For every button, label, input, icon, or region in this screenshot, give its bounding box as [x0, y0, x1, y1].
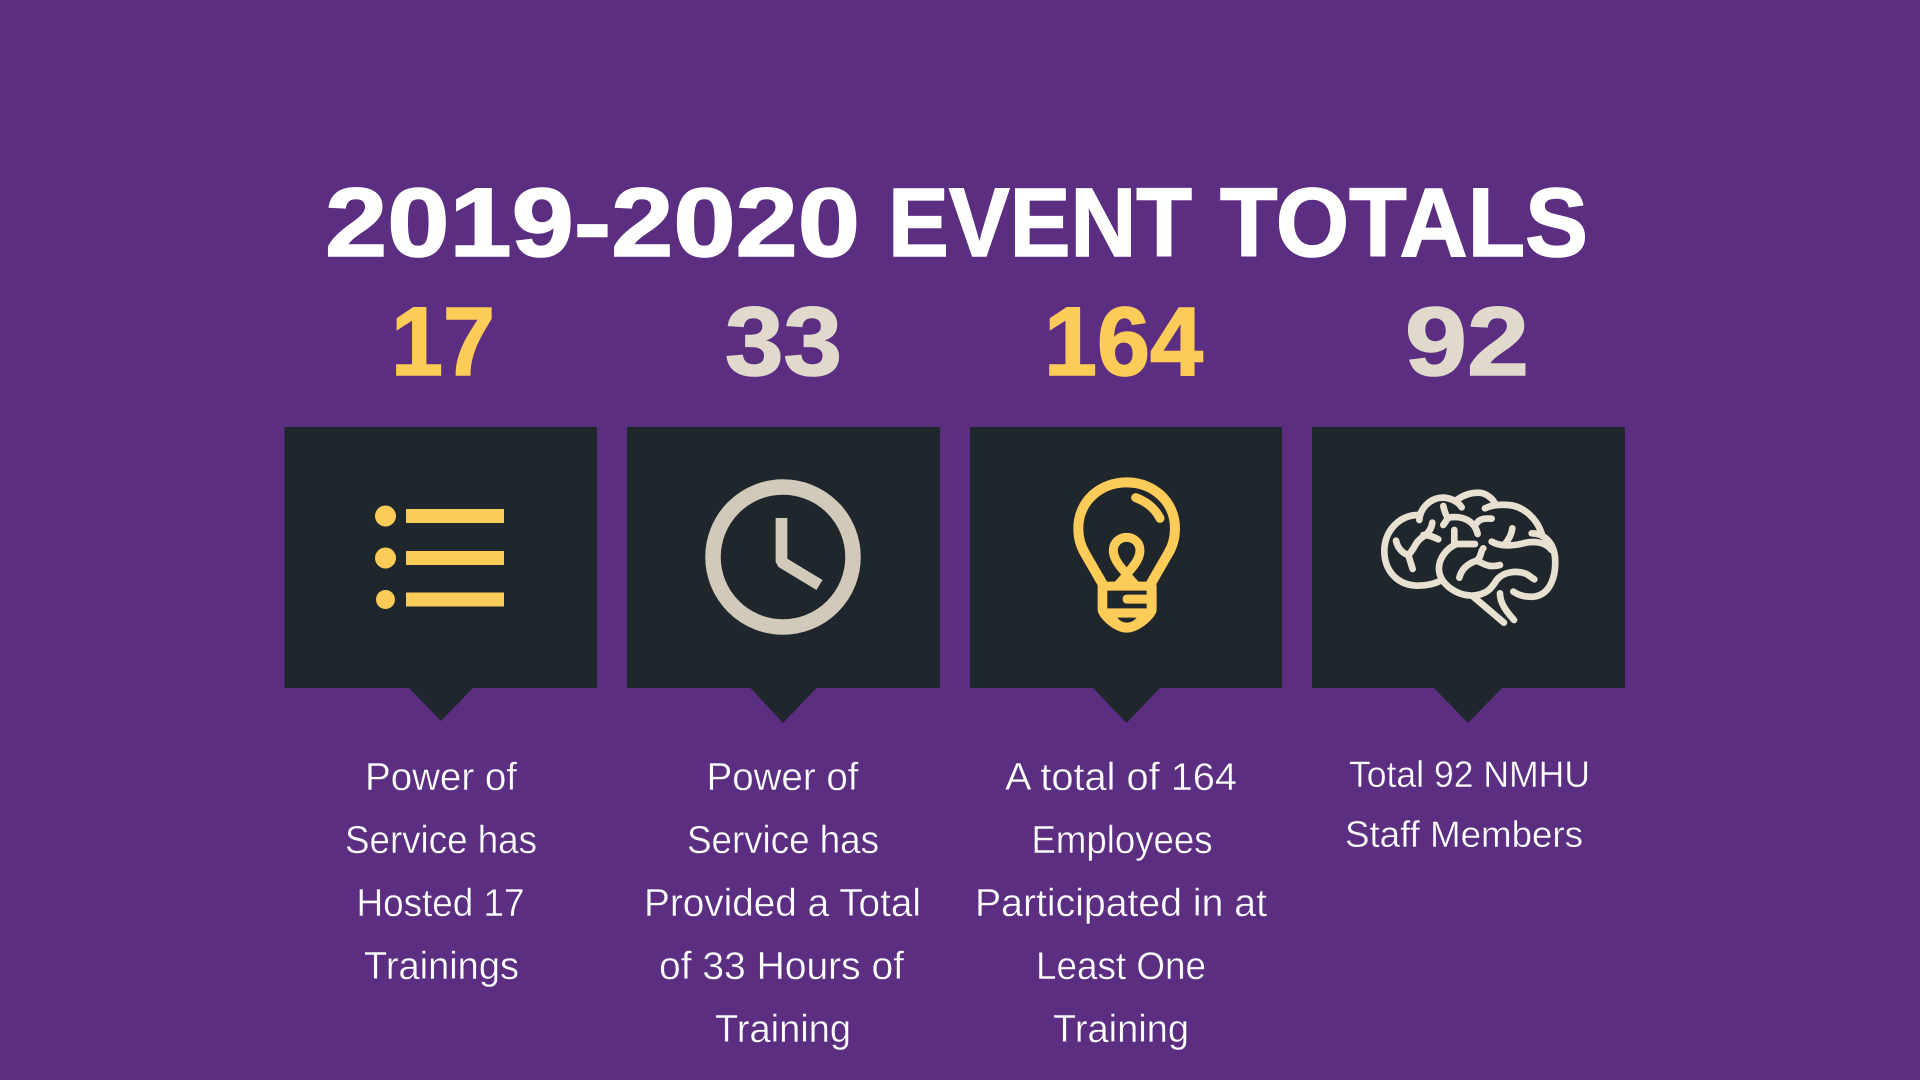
caption: [345, 756, 537, 988]
caption: Training: [715, 1008, 851, 1051]
caption: Employees: [1032, 819, 1212, 862]
icon: brain: [1384, 493, 1555, 623]
caption: Total 92 NMHU: [1349, 754, 1590, 795]
callout box: [284, 427, 597, 721]
icon: clock: [713, 487, 853, 627]
panel: staff: [1312, 287, 1625, 855]
caption: Power of: [706, 756, 859, 799]
icon: list: [375, 506, 504, 609]
caption: [1345, 754, 1590, 855]
caption: Training: [1053, 1008, 1189, 1051]
callout box: [1312, 427, 1625, 723]
title: 2019-2020: [325, 168, 860, 277]
caption: [644, 756, 921, 1051]
icon: light bulb: [1078, 482, 1175, 633]
title: TOTALS: [1220, 168, 1588, 277]
callout box: [627, 427, 940, 723]
number: 92: 92: [1405, 287, 1529, 396]
title: EVENT: [888, 168, 1192, 277]
caption: Power of: [365, 756, 517, 799]
caption: [975, 756, 1267, 1051]
caption: Least One: [1036, 945, 1206, 988]
caption: Staff Members: [1345, 814, 1583, 855]
caption: Participated in at: [975, 882, 1267, 925]
caption: Service has: [345, 819, 537, 862]
caption: A total of 164: [1005, 756, 1237, 799]
number: 33: 33: [725, 287, 842, 396]
panel: employees: [970, 287, 1282, 1051]
panel: trainings: [284, 287, 597, 988]
caption: Trainings: [364, 945, 519, 988]
caption: Hosted 17: [356, 882, 524, 925]
caption: of 33 Hours of: [659, 945, 904, 988]
panel: hours: [627, 287, 940, 1051]
caption: Provided a Total: [644, 882, 921, 925]
number: 164: 164: [1044, 287, 1203, 396]
number: 17: 17: [391, 287, 495, 396]
title: [325, 168, 1588, 277]
caption: Service has: [687, 819, 879, 862]
callout box: [970, 427, 1282, 723]
